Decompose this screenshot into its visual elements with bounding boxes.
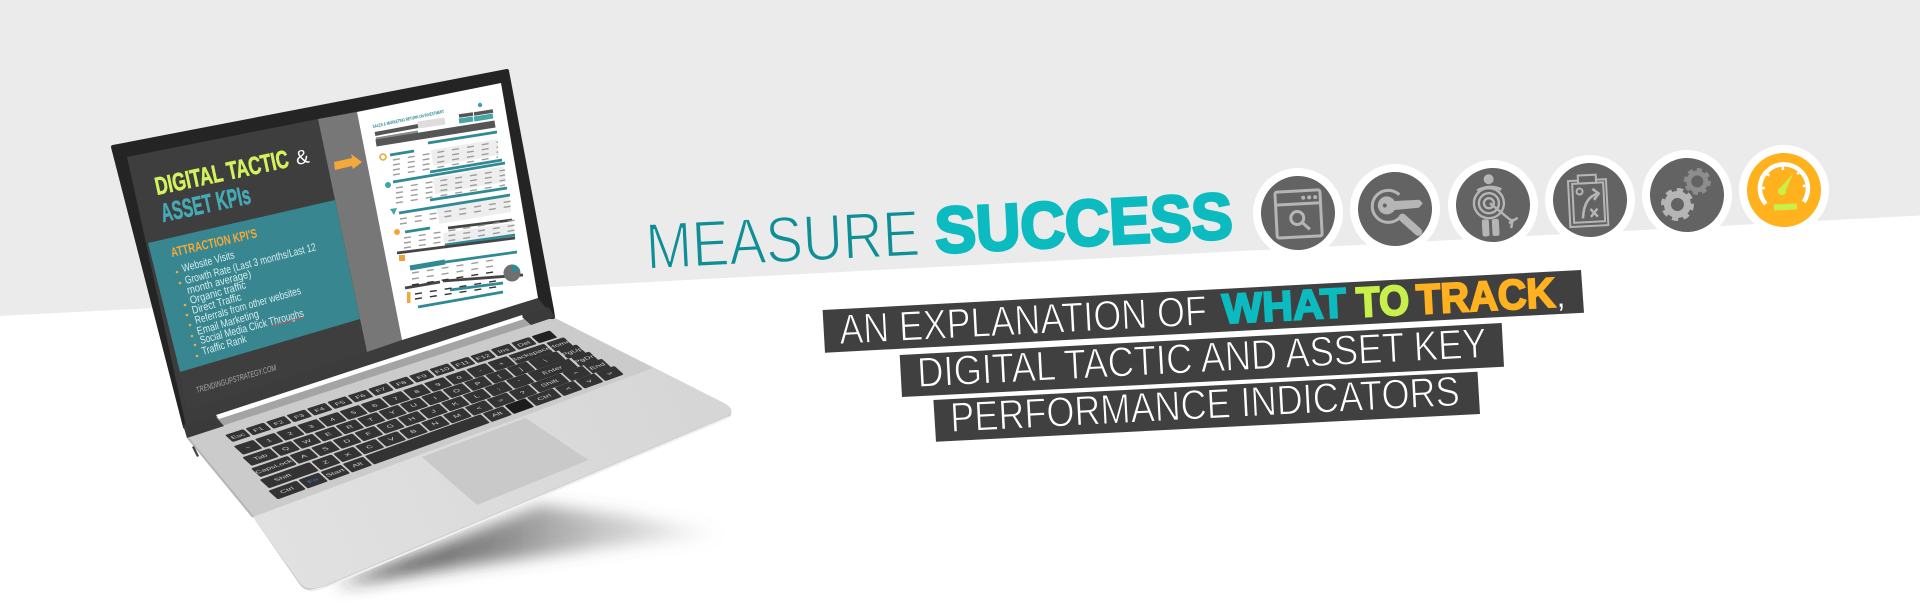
arrow: [334, 154, 362, 170]
keyboard: Tab: [252, 453, 269, 461]
subtitle bar 2: DIGITAL TACTIC AND ASSET KEY: [916, 319, 1488, 396]
keyboard: W: [301, 438, 314, 445]
slide bullet list: Email Marketing: [195, 308, 260, 338]
keyboard: <: [474, 405, 484, 411]
keyboard: K: [450, 401, 461, 407]
keyboard: End: [587, 361, 607, 371]
keyboard: >: [605, 370, 615, 377]
keyboard: ~: [244, 445, 253, 450]
keyboard: 2: [286, 431, 295, 436]
slide footer url: TRENDINGUPSTRATEGY.COM: [195, 362, 278, 395]
keyboard: F3: [293, 413, 306, 420]
keyboard: Home: [548, 339, 573, 350]
keyboard: C: [364, 443, 375, 450]
icon: key and magnifier: [1348, 162, 1442, 256]
keyboard: F11: [455, 360, 472, 368]
slide grey column: [318, 112, 402, 352]
report logo: [478, 103, 482, 107]
subtitle bar 1: TRACK: [1415, 269, 1556, 323]
icon: person with target: [1446, 158, 1540, 252]
keyboard: F8: [395, 380, 408, 387]
screen: slide: [127, 112, 402, 410]
keyboard: CapsLock: [254, 458, 295, 475]
keyboard: X: [342, 451, 353, 458]
slide bullet list: Traffic Rank: [200, 333, 248, 358]
keyboard: PgUp: [560, 346, 585, 357]
keyboard: Q: [280, 445, 292, 452]
subtitle bar 1: WHAT: [1221, 279, 1348, 332]
slide bullet list: Website Visits: [181, 249, 236, 275]
keyboard: F4: [313, 407, 327, 413]
laptop base deck: [188, 317, 731, 591]
report pie chart: [504, 264, 520, 282]
slide bullet list: [176, 241, 317, 358]
keyboard: >: [496, 397, 506, 403]
keyboard: F1: [252, 427, 265, 433]
keyboard: L: [472, 394, 481, 399]
keyboard: F7: [375, 387, 388, 394]
slide bullet list: Growth Rate (Last 3 months/Last 12: [184, 241, 317, 287]
keyboard: Ctrl: [278, 485, 296, 495]
keyboard: H: [407, 416, 417, 422]
keyboard: v: [585, 378, 594, 384]
slide bullet list: Social Media Click Throughs: [199, 308, 305, 347]
keyboard: V: [386, 436, 397, 442]
keyboard: Alt: [490, 410, 504, 418]
keyboard: R: [345, 424, 355, 430]
right hinge: [522, 307, 555, 325]
left hinge: [183, 417, 224, 438]
keyboard: Shift: [539, 378, 560, 388]
keyboard: F10: [434, 367, 451, 375]
report header boxes: [375, 111, 495, 143]
keyboard: M: [451, 412, 463, 419]
subtitle bar 1: ,: [1556, 281, 1566, 314]
keyboard: U: [409, 402, 419, 408]
keyboard: E: [324, 431, 334, 437]
keyboard: F12: [475, 353, 492, 361]
slide title: DIGITAL TACTIC: [152, 145, 291, 201]
icon: browser search: [1251, 166, 1345, 260]
keyboard: <: [563, 385, 573, 392]
keyboard: PgDn: [573, 354, 597, 365]
keyboard: F5: [334, 400, 347, 407]
slide bullet list: Direct Traffic: [191, 291, 243, 317]
slide bullet list: month average): [186, 268, 253, 297]
keyboard: T: [367, 417, 377, 423]
keyboard: 4: [329, 417, 337, 422]
keyboard: S: [321, 446, 331, 452]
slide title: ASSET KPIs: [158, 180, 253, 228]
keyboard: F9: [416, 374, 429, 380]
keyboard: F6: [354, 394, 368, 400]
heading: measure success: SUCCESS: [933, 179, 1234, 267]
keyboard: Shift: [272, 472, 293, 483]
subtitle bar 1: AN EXPLANATION OF: [838, 287, 1208, 353]
slide dark panel: [127, 119, 367, 410]
keyboard: Start: [324, 467, 346, 478]
keyboard: 9: [434, 382, 443, 388]
report title: SALES & MARKETING RETURN ON INVESTMENT: [372, 109, 445, 129]
heading: measure success: MEASURE: [644, 196, 921, 283]
keyboard: 6: [371, 403, 379, 408]
keyboard: ': [517, 379, 523, 384]
background: white slanted lower area: [0, 216, 1920, 609]
report table bands: [390, 132, 523, 307]
keyboard: Esc: [230, 432, 247, 440]
keyboard: O: [451, 388, 463, 394]
keyboard: D: [342, 438, 352, 444]
keyboard: F2: [273, 420, 286, 427]
laptop illustration: [113, 71, 731, 591]
keyboard: P: [473, 381, 483, 387]
icon: clipboard playbook: [1543, 153, 1637, 247]
keyboard: Z: [321, 459, 331, 465]
subtitle bar 3: PERFORMANCE INDICATORS: [949, 367, 1461, 441]
keyboard: B: [408, 428, 419, 434]
keyboard: N: [430, 420, 441, 427]
keyboard: Alt: [350, 461, 364, 469]
keyboard: G: [385, 423, 396, 430]
keyboard: 5: [350, 410, 358, 415]
keyboard: 3: [308, 424, 316, 429]
keyboard: ]: [518, 367, 524, 372]
keyboard: [: [496, 374, 503, 379]
touchpad: [422, 418, 588, 505]
keyboard: 1: [265, 438, 274, 443]
keyboard: Y: [388, 410, 398, 416]
report icons: [380, 154, 410, 303]
keyboard: Fn: [306, 477, 320, 485]
keyboard: -: [477, 369, 485, 373]
slide bullet list: Organic traffic: [189, 279, 248, 307]
keyboard: F: [364, 431, 374, 437]
keyboard: ^: [572, 370, 582, 376]
keyboard: ?: [518, 389, 527, 396]
subtitle block: [823, 269, 1584, 442]
keyboard: +: [498, 361, 506, 367]
screen: report page: [357, 83, 538, 340]
keyboard: Enter: [541, 365, 565, 376]
keyboard: ;: [495, 387, 502, 391]
report table rows: [393, 142, 516, 299]
keyboard: I: [432, 396, 439, 401]
slide subheading: ATTRACTION KPI'S: [169, 225, 259, 260]
bezel lower section: [127, 83, 546, 426]
slide teal panel: [148, 200, 360, 372]
report light table cells: [432, 147, 514, 241]
keyboard: Ctrl: [535, 392, 553, 402]
subtitle bar 1: TO: [1355, 276, 1410, 326]
keyboard: J: [429, 409, 438, 414]
laptop lid: [113, 71, 553, 427]
icon: gears: [1640, 148, 1734, 242]
keyboard: Del: [516, 340, 533, 348]
keyboard: 0: [455, 375, 464, 381]
keyboard: [225, 330, 624, 499]
icon: speedometer: [1737, 143, 1831, 237]
slide bullet list: Referrals from other websites: [194, 285, 303, 327]
keyboard: Backspace: [510, 346, 553, 363]
hinge bar: [216, 315, 533, 426]
keyboard: \: [542, 358, 549, 363]
laptop shadow: [335, 505, 720, 586]
icon row: [1251, 143, 1831, 260]
heading: measure success: [644, 179, 1234, 283]
slide title: &: [293, 145, 312, 170]
keyboard: 8: [413, 389, 422, 394]
keyboard: A: [299, 453, 309, 459]
keyboard: 7: [392, 396, 400, 401]
subtitle bar 1: [823, 269, 1584, 353]
keyboard: Ins: [497, 347, 512, 354]
